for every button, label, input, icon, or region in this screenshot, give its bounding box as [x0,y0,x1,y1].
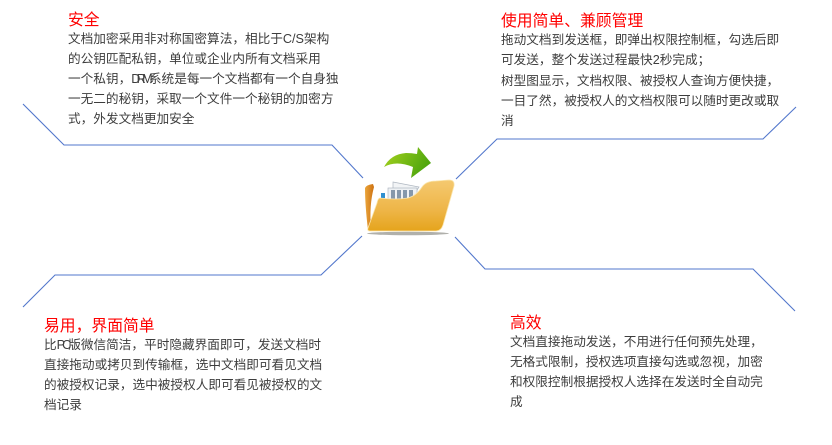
text block: 使用简单 description: 一目了然，被授权人的文档权限可以随时更改或取 [501,94,779,108]
icon part: shadow [367,232,449,235]
text block: 使用简单 description: 消 [501,114,514,128]
icon part: green arrow [384,147,431,178]
text block: 使用简单 description: 树型图显示，文档权限、被授权人查询方便快捷， [501,74,779,88]
text block: 易用 description: 直接拖动或拷贝到传输框，选中文档即可看见文档 [44,358,322,372]
heading: 使用简单、兼顾管理: 使用简单、兼顾管理 [501,13,643,30]
text block: 安全 description: 的公钥匹配私钥，单位或企业内所有文档采用 [68,52,321,66]
text block: 高效 description: 无格式限制，授权选项直接勾选或忽视，加密 [510,355,763,369]
text block: 高效 description [510,335,763,409]
text block: 使用简单 description: 可发送，整个发送过程最快2秒完成； [501,53,710,67]
text block: 安全 description: 一个私钥，DRM系统是每一个文档都有一个自身独 [68,72,339,86]
icon part: papers [381,182,419,199]
text block: 易用 description: 的被授权记录，选中被授权人即可看见被授权的文 [44,378,322,392]
text block: 易用 description: 档记录 [44,398,82,412]
text block: 安全 description [68,32,339,126]
icon part: folder back flap [365,184,374,230]
text block: 易用 description: 比PC版微信简洁，平时隐藏界面即可，发送文档时 [44,338,321,352]
panel: 使用简单、兼顾管理 [501,12,779,128]
panel: 高效 [510,314,763,409]
heading: 易用，界面简单: 易用，界面简单 [44,318,155,335]
text block: 使用简单 description: 拖动文档到发送框，即弹出权限控制框，勾选后即 [501,33,779,47]
panel: 安全 [68,11,339,126]
text block: 高效 description: 和权限控制根据授权人选择在发送时全自动完 [510,375,763,389]
text block: 安全 description: 式，外发文档更加安全 [68,112,194,126]
text block: 高效 description: 成 [510,395,523,409]
panel: 易用，界面简单 [44,317,322,412]
text block: 安全 description: 文档加密采用非对称国密算法，相比于C/S架构 [68,32,329,46]
text block: 安全 description: 一无二的秘钥，采取一个文件一个秘钥的加密方 [68,92,333,106]
text block: 易用 description [44,338,322,412]
heading: 高效: 高效 [510,315,542,332]
text block: 使用简单 description [501,33,779,128]
heading: 安全: 安全 [68,12,100,29]
text block: 高效 description: 文档直接拖动发送，不用进行任何预先处理， [510,335,763,349]
icon part: folder front [368,180,454,231]
